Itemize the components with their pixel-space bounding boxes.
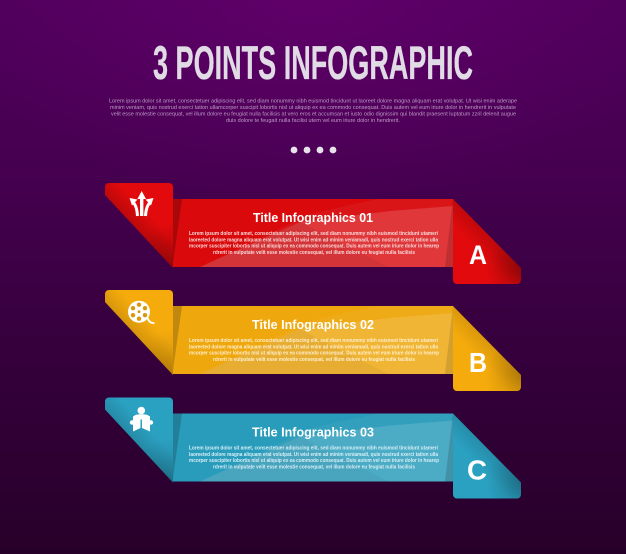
heading 03: Title Infographics 03: [252, 424, 374, 440]
letter B: B: [469, 347, 487, 378]
intro text block: velit esse molestie consequat, vel illum dolore eu feugiat nulla facilisis at vero eros et accumsan et iusto odio dignissim qui blandit praesent luptatum zzril delenit augue: [111, 112, 516, 118]
body text 01: Lorem ipsum dolor sit amet, consectetuer adipiscing elit, sed diam nonummy nibh euismod tincidunt utameri: [189, 231, 438, 237]
body text 02: mcorper suscipiter lobortis nisl ut aliquip ex ea commodo consequat. Duis autem vel eum iriure dolor in hearep: [189, 351, 440, 357]
heading 02: Title Infographics 02: [252, 317, 374, 332]
right flap: [453, 414, 521, 498]
left flap: [105, 290, 173, 375]
band: [173, 199, 453, 267]
right flap: [453, 306, 521, 391]
band: [173, 306, 453, 374]
body text 02: [189, 338, 440, 363]
body text 03: mcorper suscipiter lobortis nisl ut aliquip ex ea commodo consequat. Duis autem vel eum iriure dolor in hearep: [189, 458, 440, 464]
heading 01: Title Infographics 01: [253, 210, 373, 225]
body text 01: laoreeted dolore magna aliquam erat volutpat. Ut wisi enim ad minim veniamadi, quis nostrud exerci tation ulla: [189, 237, 439, 243]
icon: reader: [130, 407, 153, 432]
body text 01: rdrerit in vulputate velit esse molestie consequat, vel illum dolore eu feugiat nulla facilisis: [213, 250, 415, 256]
body text 03: laoreeted dolore magna aliquam erat volutpat. Ut wisi enim ad minim veniamadi, quis nostrud exerci tation ulla: [189, 452, 439, 458]
letter A: A: [469, 240, 487, 270]
left flap: [105, 183, 173, 268]
body text 02: rdrerit in vulputate velit esse molestie consequat, vel illum dolore eu feugiat nulla facilisis: [213, 357, 415, 363]
body text 03: Lorem ipsum dolor sit amet, consectetuer adipiscing elit, sed diam nonummy nibh euismod tincidunt utameri: [189, 446, 438, 452]
intro text block: [109, 98, 517, 124]
body text 03: [189, 446, 440, 470]
left flap: [105, 398, 173, 482]
dots: [291, 147, 336, 153]
panel: item 02 yellow: [105, 290, 521, 391]
icon: film reel: [128, 301, 154, 323]
right flap: [453, 199, 521, 284]
letter C: C: [467, 454, 487, 486]
intro text block: minim veniam, quis nostrud exerci tation ullamcorper suscipit lobortis nisl ut aliquip ex ea commodo consequat. Duis autem vel eum iriure dolor in hendrerit in vulputate: [110, 105, 516, 111]
band: [173, 414, 453, 482]
panel: item 01 red: [105, 183, 521, 284]
body text 01: [189, 231, 440, 256]
intro text block: Lorem ipsum dolor sit amet, consectetuer adipiscing elit, sed diam nonummy nibh euismod tincidunt ut laoreet dolore magna aliquam erat volutpat. Ut wisi enim aderape: [109, 98, 517, 104]
intro text block: duis dolore te feugait nulla facilisi utem vel eum iriure dolor in hendrerit.: [226, 118, 400, 124]
body text 03: rdrerit in vulputate velit esse molestie consequat, vel illum dolore eu feugiat nulla facilisis: [213, 464, 415, 470]
body text 01: mcorper suscipiter lobortis nisl ut aliquip ex ea commodo consequat. Duis autem vel eum iriure dolor in hearep: [189, 244, 440, 250]
body text 02: laoreeted dolore magna aliquam erat volutpat. Ut wisi enim ad minim veniamadi, quis nostrud exerci tation ulla: [189, 344, 439, 350]
panel: item 03 blue: [105, 398, 521, 498]
body text 02: Lorem ipsum dolor sit amet, consectetuer adipiscing elit, sed diam nonummy nibh euismod tincidunt utameri: [189, 338, 438, 344]
icon: arrows: [130, 191, 154, 216]
